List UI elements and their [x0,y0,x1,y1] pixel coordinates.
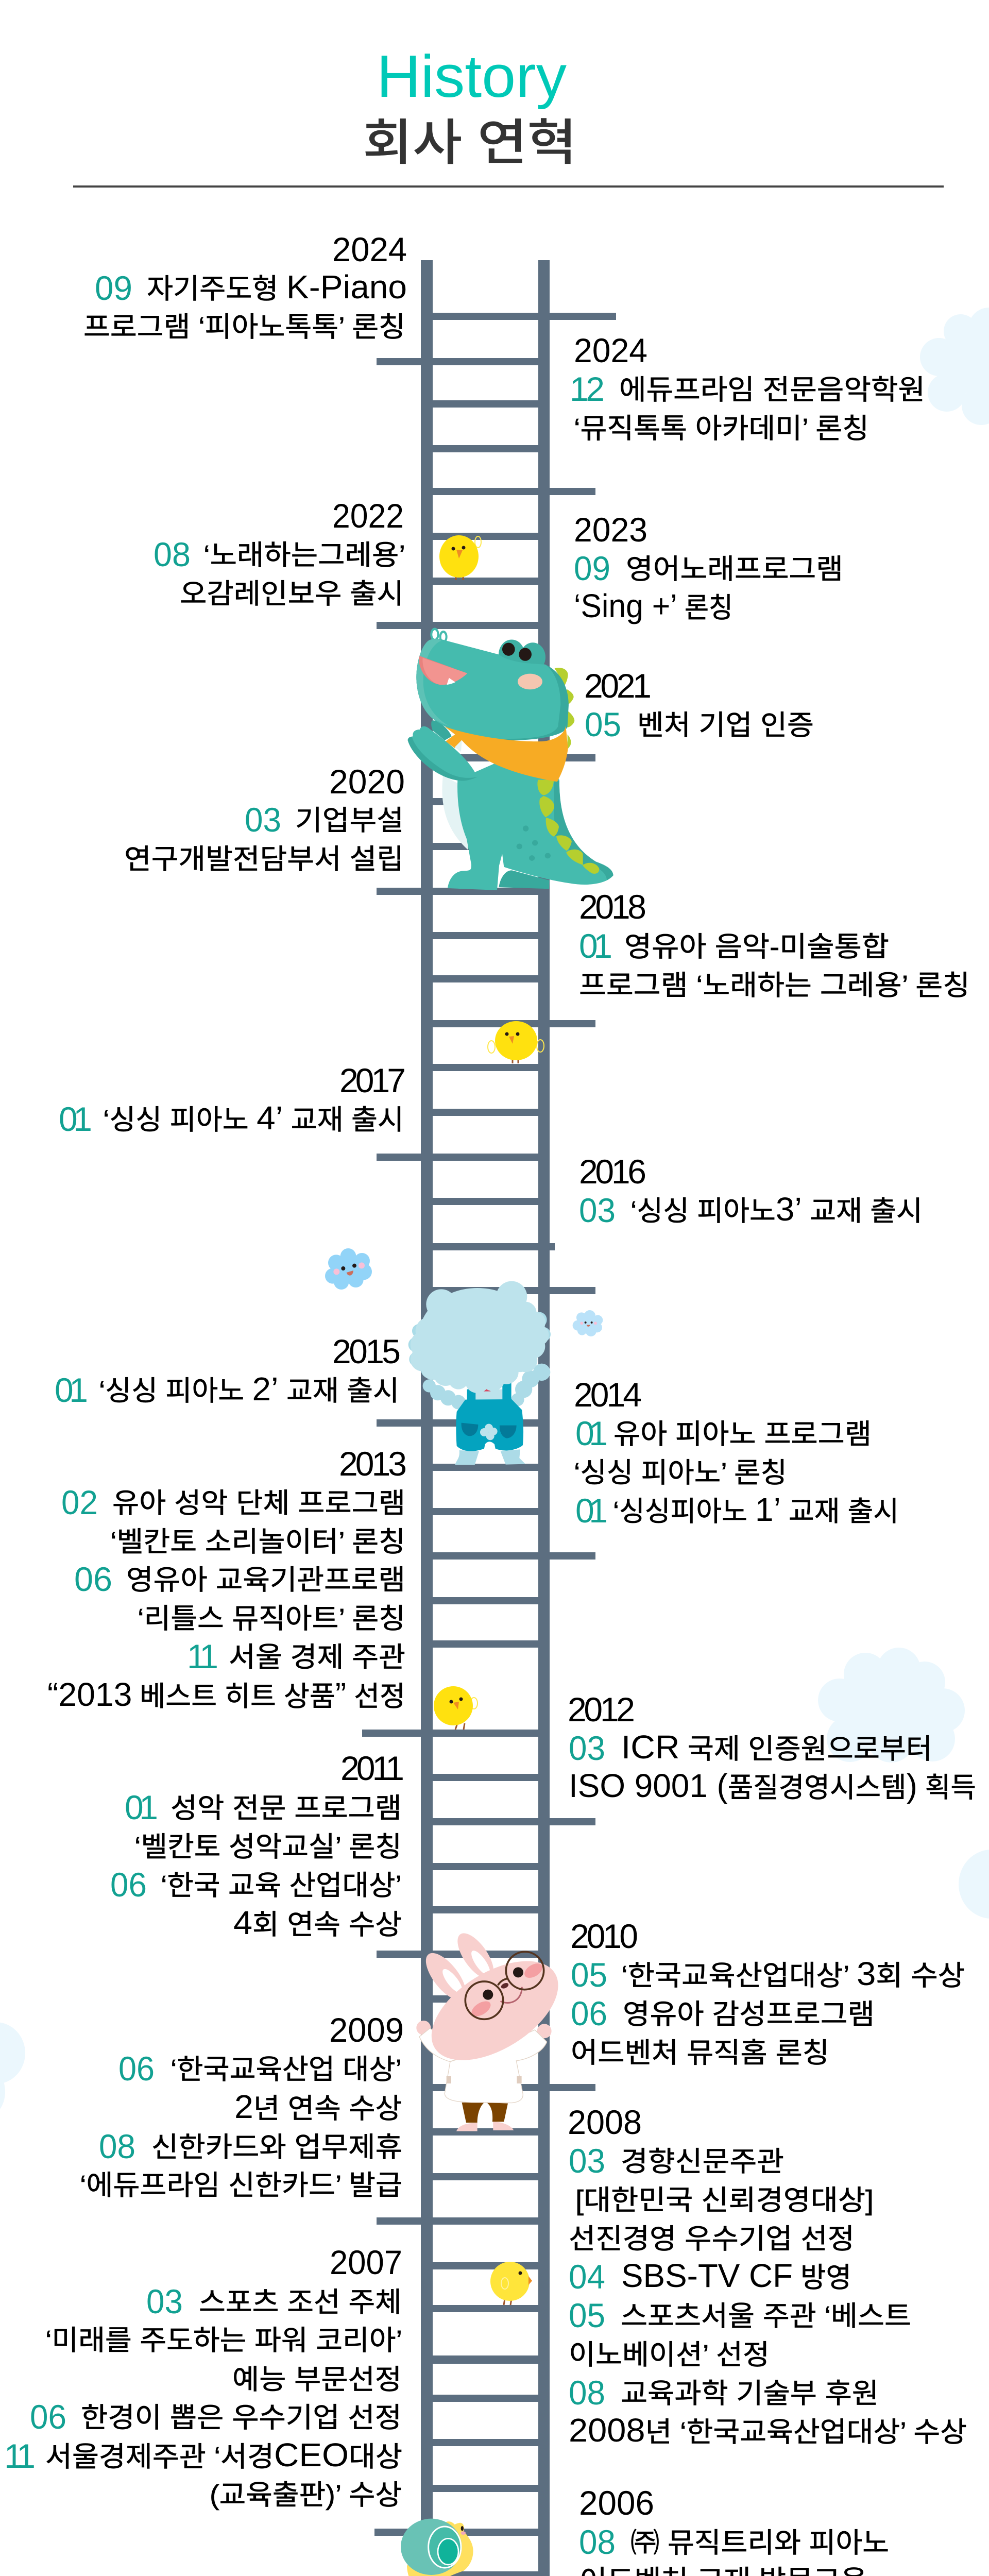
crocodile eyes [502,643,515,656]
block: 2010: 06 [571,1994,607,2032]
heading: History: History [377,43,567,110]
block: 2013: 11 [187,1637,218,1675]
crocodile scarf [445,725,568,782]
block: 2017 [59,1061,406,1138]
block: 2009: ‘한국교육산업 대상’ [170,2054,402,2085]
block: 2015: 01 [55,1371,88,1409]
snail cheek [461,2531,466,2535]
block: 2018 [579,888,970,1001]
block: 2012 [568,1690,976,1804]
block: 2008: 교육과학 기술부 후원 [621,2378,879,2409]
block: 2008 [568,2103,967,2449]
crocodile head [416,639,569,740]
block: 2008: 04 [569,2258,605,2296]
block: 2008: 2008년 ‘한국교육산업대상’ 수상 [569,2412,967,2449]
block: 2009: 신한카드와 업무제휴 [151,2132,402,2163]
sheep shirt and straps [475,1389,502,1400]
block: 2022: ‘노래하는그레용’ [203,540,405,571]
snail eye [461,2526,464,2531]
block: 2024 left: 프로그램 ‘피아노톡톡’ 론칭 [83,312,405,343]
block: 2018: 영유아 음악-미술통합 [624,931,889,962]
block: 2024 right: 2024 [574,331,647,369]
block: 2013: 2013 [339,1445,407,1483]
block: 2011 [110,1749,404,1941]
block: 2010: 2010 [570,1917,638,1955]
sheep tail [480,1424,498,1440]
snail shell [401,2519,462,2575]
icon: chick 1 [439,535,481,580]
block: 2011: 성악 전문 프로그램 [170,1793,402,1824]
block: 2022: 오감레인보우 출시 [180,579,404,609]
decorative cloud: top right [920,308,989,425]
block: 2011: 2011 [340,1749,404,1787]
block: 2006: ㈜ 뮤직트리와 피아노 [630,2528,889,2558]
block: 2020: 2020 [329,762,405,801]
block: 2010: ‘한국교육산업대상’ 3회 수상 [621,1955,965,1992]
rabbit glasses [465,1952,544,2019]
block: 2006: 2006 [579,2484,654,2522]
block: 2018: 2018 [579,888,646,926]
ladder rungs [362,313,616,2576]
block: 2011: 4회 연속 수상 [233,1904,402,1941]
rabbit legs [462,2103,508,2123]
block: 2015 [55,1332,401,1409]
rabbit eyes [483,1990,493,2000]
block: 2008: 08 [569,2374,605,2412]
block: 2014: 2014 [574,1376,642,1414]
block: 2013: ‘리틀스 뮤직아트’ 론칭 [138,1603,405,1634]
block: 2010: 어드벤처 뮤직홈 론칭 [571,2038,829,2069]
block: 2014: ‘싱싱피아노 1’ 교재 출시 [613,1491,899,1528]
crocodile cheek [518,674,542,689]
icon: crocodile [408,629,613,890]
block: 2014: ‘싱싱 피아노’ 론칭 [574,1458,787,1488]
crocodile front arm [408,726,478,781]
block: 2016: ‘싱싱 피아노3’ 교재 출시 [630,1191,923,1228]
block: 2012: ISO 9001 (품질경영시스템) 획득 [569,1767,976,1804]
block: 2015: 2015 [332,1332,401,1370]
block: 2024 right [570,331,925,444]
rabbit lab coat [419,2028,547,2103]
block: 2021: 05 [585,705,621,743]
block: 2013: 영유아 교육기관프로램 [126,1565,405,1596]
block: 2020 [124,762,405,875]
block: 2020: 기업부설 [295,805,404,836]
block: 2011: ‘한국 교육 산업대상’ [161,1870,402,1901]
block: 2018: 프로그램 ‘노래하는 그레용’ 론칭 [579,970,970,1001]
rabbit head [415,1941,575,2080]
icon: sheep [408,1281,551,1465]
block: 2012: ICR 국제 인증원으로부터 [621,1728,932,1766]
block: 2024 left: 09 [95,269,132,307]
sheep hair [408,1312,551,1379]
rabbit shoes [456,2122,514,2131]
block: 2017: ‘싱싱 피아노 4’ 교재 출시 [103,1099,404,1137]
block: 2024 right: 에듀프라임 전문음악학원 [619,375,925,405]
rabbit ears [419,1947,473,2007]
sheep pockets [462,1423,478,1436]
block: 2021: 2021 [584,667,652,705]
block: 2007: 한경이 뽑은 우수기업 선정 [81,2402,402,2433]
icon: rabbit [415,1927,575,2131]
block: 2013: 02 [61,1483,98,1521]
icon: chick 3 [434,1686,478,1730]
block: 2024 left [83,230,407,343]
block: 2009: 08 [99,2127,135,2165]
block: 2013: “2013 베스트 히트 상품” 선정 [47,1676,405,1713]
block: 2008: 03 [569,2142,605,2180]
block: 2006: 08 [579,2523,616,2561]
block: 2010 [570,1917,965,2069]
block: 2013: 유아 성악 단체 프로그램 [112,1488,405,1519]
crocodile spots [517,825,551,861]
block: 2023 [574,511,843,624]
block: 2007: 11 [4,2437,36,2475]
decorative cloud: middle right [818,1648,965,1762]
block: 2015: ‘싱싱 피아노 2’ 교재 출시 [99,1370,399,1408]
block: 2014: 01 [575,1492,608,1530]
block: 2020: 연구개발전담부서 설립 [124,844,404,875]
crocodile eye bumps [499,639,525,670]
block: 2007 [4,2243,402,2511]
title divider [73,185,944,188]
block: 2007: 서울경제주관 ‘서경 CEO대상 [45,2436,402,2473]
block: 2007: (교육출판)’ 수상 [210,2480,402,2511]
block: 2011: 01 [125,1788,158,1826]
block: 2009: 06 [118,2049,155,2088]
block: 2007: ‘미래를 주도하는 파워 코리아’ [45,2325,402,2356]
block: 2023: 영어노래프로그램 [626,554,843,585]
block: 2010: 05 [571,1956,607,1994]
ladder rails [421,260,550,2576]
block: 2012: 2012 [568,1690,635,1728]
block: 2021 [584,667,814,743]
ladder [362,260,616,2576]
icon: snail [401,2519,473,2576]
sheep legs [455,1449,525,1465]
block: 2021: 벤처 기업 인증 [637,710,814,741]
crocodile nostrils [431,629,438,640]
crocodile back foot [499,870,550,889]
rabbit nose [500,1982,509,1990]
rabbit hands [416,2021,431,2035]
decorative cloud: left edge [0,2022,25,2117]
block: 2024 right: 12 [570,370,605,408]
rabbit cheeks [469,1998,493,2020]
block: 2024 right: ‘뮤직톡톡 아카데미’ 론칭 [574,413,869,444]
block: 2024 left: 자기주도형 K-Piano [147,268,407,306]
block: 2008: 선진경영 우수기업 선정 [569,2224,855,2255]
icon: cloud face, pale blue [573,1310,603,1336]
block: 2023: 2023 [574,511,647,549]
block: 2008: [대한민국 신뢰경영대상] [575,2185,874,2216]
crocodile mouth [419,656,467,685]
crocodile back hand [431,720,452,740]
block: 2010: 영유아 감성프로그램 [623,1999,875,2030]
block: 2012: 03 [569,1729,605,1767]
block: 2022: 2022 [332,497,404,535]
heading: 회사 연혁: 회사 연혁 [363,115,577,171]
block: 2022: 08 [154,535,191,573]
decorative cloud: right edge [959,1850,989,1919]
block: 2017: 01 [59,1100,92,1138]
block: 2008: 2008 [568,2103,642,2141]
crocodile body [448,762,613,890]
block: 2014: 01 [575,1414,608,1452]
block: 2023: 09 [574,549,610,587]
block: 2007: 06 [30,2398,66,2436]
block: 2009: ‘에듀프라임 신한카드’ 발급 [80,2170,402,2201]
block: 2011: 06 [110,1866,147,1904]
block: 2007: 예능 부문선정 [232,2364,402,2395]
block: 2018: 01 [579,927,612,965]
block: 2016 [579,1153,923,1229]
icon: cloud face, blue [325,1248,372,1290]
crocodile back spikes [537,668,599,874]
icon: chick 2 [488,1021,544,1063]
block: 2006 [579,2484,889,2576]
block: 2014 [574,1376,899,1530]
block: 2020: 03 [245,801,281,839]
block: 2008: 05 [569,2296,605,2334]
sheep overalls [456,1399,523,1451]
block: 2016: 2016 [579,1153,646,1191]
block: 2008: 이노베이션’ 선정 [569,2340,770,2370]
block: 2023: ‘Sing +’ 론칭 [574,587,733,624]
sheep arms [423,1364,550,1410]
block: 2008: 경향신문주관 [621,2146,784,2177]
block: 2009 [80,2011,404,2201]
block: 2013: 서울 경제 주관 [229,1642,405,1673]
snail body [407,2521,473,2576]
block: 2016: 03 [579,1191,616,1229]
block: 2007: 2007 [330,2243,402,2281]
block: 2008: SBS-TV CF 방영 [621,2257,851,2294]
block: 2008: 스포츠서울 주관 ‘베스트 [621,2301,911,2332]
block: 2014: 유아 피아노 프로그램 [613,1419,872,1450]
crocodile belly [442,776,470,850]
block: 2024 left: 2024 [332,230,407,268]
block: 2009: 2009 [329,2011,404,2049]
block: 2013: ‘벨칸토 소리놀이터’ 론칭 [110,1527,405,1557]
rabbit smile [501,1987,522,2003]
block: 2013: 06 [74,1560,112,1598]
block: 2017: 2017 [339,1061,406,1099]
block: 2022 [154,497,405,609]
block: 2007: 스포츠 조선 주체 [199,2287,402,2318]
block: 2011: ‘벨칸토 성악교실’ 론칭 [134,1832,402,1862]
icon: chick 4 [490,2262,532,2305]
block: 2013 [47,1445,407,1713]
block: 2007: 03 [146,2282,183,2320]
block: 2009: 2년 연속 수상 [234,2088,402,2125]
title [363,43,577,171]
